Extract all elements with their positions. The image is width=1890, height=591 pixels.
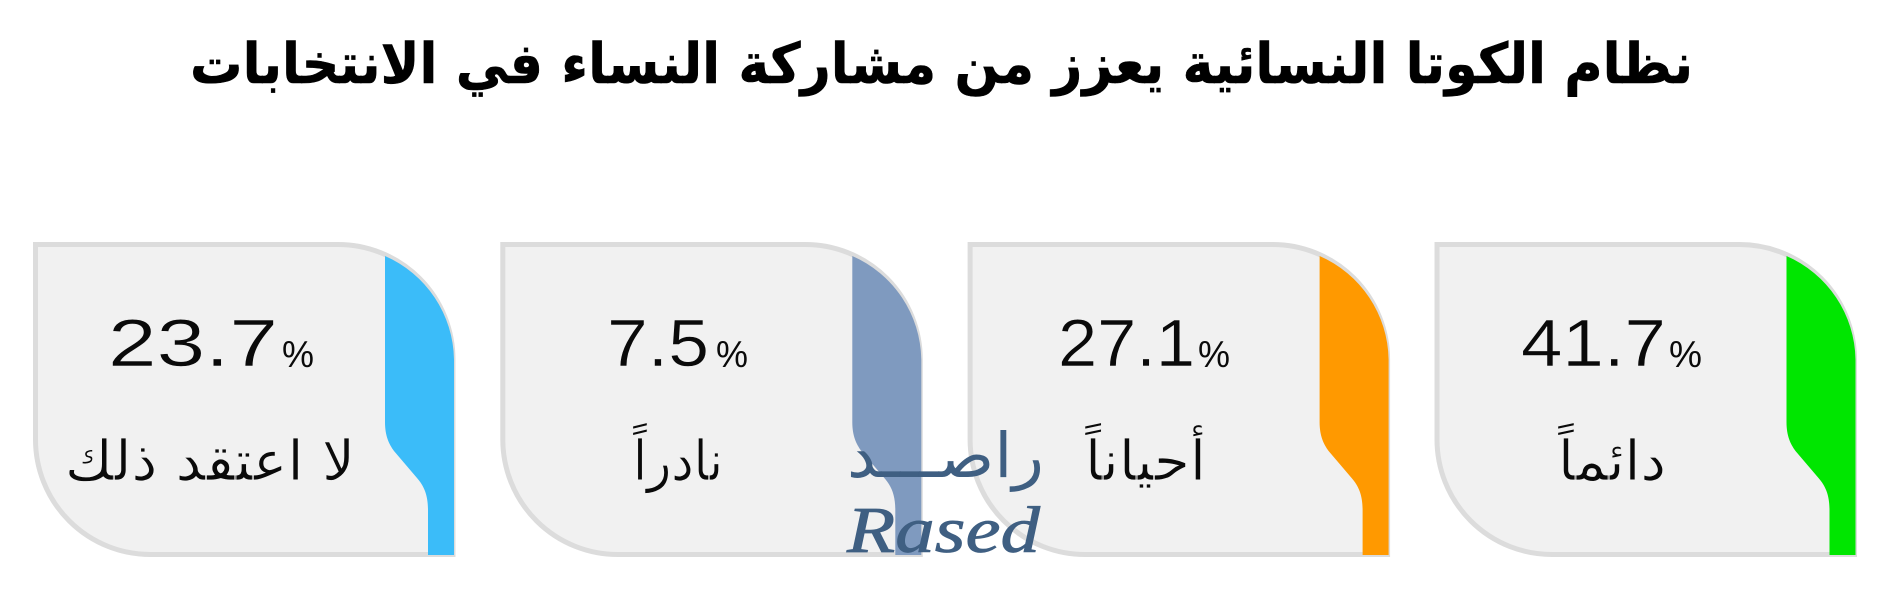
card background	[1437, 244, 1854, 554]
title: نظام الكوتا النسائية يعزز من مشاركة النساء في الانتخابات	[190, 32, 1693, 97]
label: لا اعتقد ذلك	[65, 429, 355, 493]
panel: لا اعتقد ذلك 23.7%	[36, 244, 454, 555]
label: نادراً	[632, 422, 723, 493]
percent sign: %	[282, 334, 314, 375]
panel: أحياناً 27.1%	[970, 244, 1389, 555]
value 23.7: 23.7	[108, 306, 278, 381]
panel: نادراً 7.5%	[503, 244, 921, 555]
accent strip: steel blue	[852, 256, 921, 555]
logo arabic wordmark: راصـــد	[847, 419, 1044, 492]
percent sign: %	[1669, 334, 1702, 375]
card background	[970, 244, 1388, 554]
accent strip: orange	[1320, 256, 1389, 555]
value 41.7: 41.7	[1521, 306, 1666, 381]
card background	[503, 244, 920, 554]
percent sign: %	[1198, 334, 1230, 375]
label: أحياناً	[1084, 422, 1206, 493]
label: دائماً	[1557, 422, 1666, 493]
value 7.5: 7.5	[607, 306, 709, 381]
accent strip: green	[1786, 256, 1856, 555]
percent sign: %	[716, 334, 748, 375]
panel: دائماً 41.7%	[1437, 244, 1856, 555]
card background	[36, 244, 453, 554]
accent strip: blue	[385, 256, 454, 555]
value 27.1: 27.1	[1058, 306, 1195, 381]
logo latin wordmark: Rased	[846, 494, 1041, 567]
logo: Rased watermark	[846, 419, 1044, 567]
